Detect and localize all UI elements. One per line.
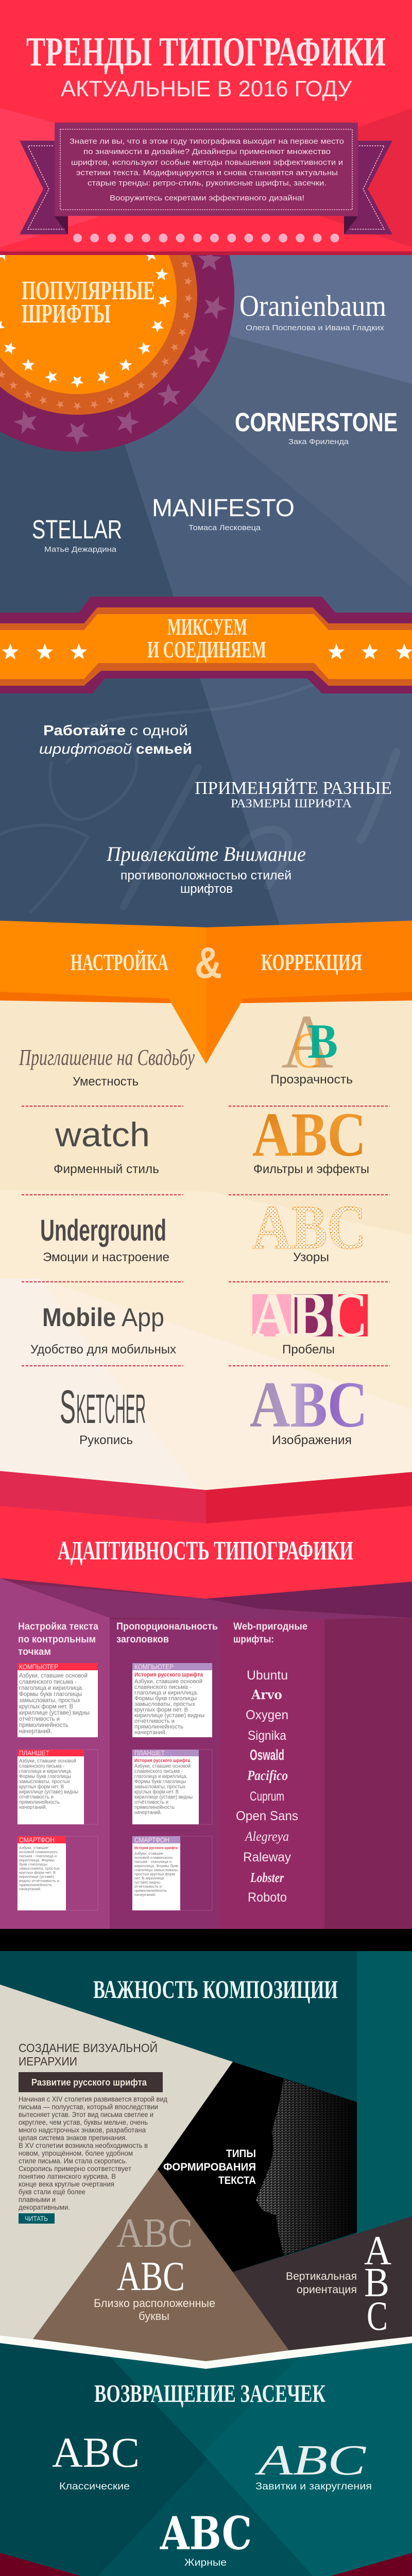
card: desktop: Формы букв глаголицы <box>19 1691 82 1698</box>
panel: visual hierarchy: стиле письма. Им стала скоропись. <box>19 2157 127 2165</box>
panel: serifs return <box>0 2343 412 2576</box>
item: appropriateness <box>19 1045 195 1089</box>
text block: font sizes tip: РАЗМЕРЫ ШРИФТА <box>231 797 352 810</box>
card: tablet: отчётливость и <box>19 1794 54 1800</box>
card: smartphone: начертаний. <box>19 1887 41 1891</box>
panel: types of presentation background <box>0 2545 412 2576</box>
button <box>19 2213 55 2224</box>
card: desktop: Азбуки, ставшие основой <box>134 1679 202 1685</box>
dots row <box>73 234 339 242</box>
item: patterns: ABC <box>252 1193 366 1262</box>
card: tablet: славянского письма - <box>19 1764 64 1769</box>
card: desktop: замысловаты, простых <box>19 1698 80 1704</box>
column: web fonts: Raleway <box>243 1850 291 1865</box>
panel: text forming types: ТИПЫ <box>226 2148 256 2160</box>
item: mood <box>40 1214 169 1264</box>
panel: vertical orientation: A <box>364 2228 391 2274</box>
card: tablet: начертаний. <box>134 1810 162 1816</box>
panel: vertical orientation: ориентация <box>297 2284 357 2296</box>
card: smartphone <box>18 1836 98 1910</box>
panel: visual hierarchy: письма — полуустав, который впоследствии <box>19 2103 158 2111</box>
band: white divider <box>0 2335 412 2369</box>
text block: font sizes tip <box>195 778 392 810</box>
item: transparency: Прозрачность <box>270 1073 353 1087</box>
font sample: Manifesto: MANIFESTO <box>152 495 295 522</box>
text block: contrast tip: противоположностью стилей <box>121 869 291 883</box>
column: web fonts: Oxygen <box>246 1708 288 1722</box>
band: dark red fold <box>0 1468 412 1528</box>
column: heading proportions: заголовков <box>116 1634 169 1645</box>
card: smartphone: простых круглых форм <box>134 1872 175 1876</box>
panel: text forming types: ТЕКСТА <box>218 2175 256 2187</box>
band: mix and combine heading: МИКСУЕМ <box>167 614 247 640</box>
item: images: ABC <box>250 1369 368 1441</box>
panel: close letters: Близко расположенные <box>94 2297 215 2310</box>
panel: vertical orientation: Вертикальная <box>286 2270 357 2282</box>
card: smartphone: прямолинейность <box>19 1883 52 1887</box>
panel: visual hierarchy: конце века круглые очертания <box>19 2180 114 2188</box>
panel: close letters: ABC <box>116 2211 193 2256</box>
card: smartphone: письма - глаголица и <box>19 1854 57 1858</box>
card: desktop <box>18 1663 98 1737</box>
panel: orange settings heading: КОРРЕКЦИЯ <box>261 949 362 975</box>
item: mobile: Удобство для мобильных <box>30 1343 176 1357</box>
card: tablet: прямолинейность <box>134 1805 175 1810</box>
panel: visual hierarchy: вытесняет устав. Этот вид письма светлее и <box>19 2110 153 2119</box>
ribbon callout: шрифтов, используют особые методы повышения эффективности и <box>71 158 343 167</box>
item: mood: Underground <box>40 1214 166 1247</box>
card: desktop: славянского письма - <box>19 1679 77 1685</box>
item: whitespace: Пробелы <box>282 1343 335 1357</box>
button: ЧИТАТЬ <box>25 2214 48 2223</box>
text block: contrast tip: Привлекайте Внимание <box>106 842 306 866</box>
text block: font family tip <box>39 722 192 757</box>
card: tablet: Формы букв глаголицы <box>19 1773 71 1780</box>
card: smartphone: Азбуки, ставшие <box>19 1845 48 1850</box>
card: desktop: прямолинейность <box>19 1722 68 1728</box>
card: tablet: прямолинейность <box>19 1800 60 1805</box>
panel: text forming types <box>158 2062 357 2272</box>
panel: text forming types: ФОРМИРОВАНИЯ <box>163 2161 256 2173</box>
panel: orange settings heading: & <box>195 939 222 988</box>
column: heading proportions <box>116 1621 218 1910</box>
column: web fonts: Alegreya <box>244 1829 289 1844</box>
item: corporate style <box>54 1115 159 1176</box>
card: desktop: глаголица и кириллица. <box>19 1685 83 1691</box>
panel: visual hierarchy: букв стали ещё более <box>19 2188 85 2196</box>
card: smartphone: (уставе) видны <box>134 1880 160 1885</box>
card: desktop: кириллице (уставе) видны <box>134 1713 204 1719</box>
card: smartphone: Азбуки, ставшие <box>134 1851 163 1856</box>
card: smartphone: замысловаты, простых <box>19 1866 60 1871</box>
panel: visual hierarchy: округлее, чем устав, буквы мельче, очень <box>19 2118 148 2126</box>
panel: vertical orientation: C <box>367 2294 388 2339</box>
text block: contrast tip: шрифтов <box>180 882 233 896</box>
panel: visual hierarchy: понятию латинского курсива. В <box>19 2172 116 2180</box>
panel: vertical orientation: B <box>364 2260 389 2306</box>
card: desktop: прямолинейность <box>134 1724 183 1730</box>
panel: vertical orientation <box>233 2216 412 2350</box>
sample: curls: Завитки и закругления <box>255 2481 372 2492</box>
card: tablet: начертаний. <box>19 1805 47 1810</box>
card: tablet: ПЛАНШЕТ <box>134 1749 165 1757</box>
column: web fonts: шрифты: <box>233 1634 274 1645</box>
card: tablet: Азбуки, ставшие основой <box>134 1763 191 1769</box>
panel: visual hierarchy: В XV столетии возникла необходимость в <box>19 2141 148 2149</box>
card: desktop: Азбуки, ставшие основой <box>19 1673 88 1679</box>
font sample: Cornerstone: Зака Фриленда <box>288 437 349 446</box>
panel: visual hierarchy: Скоропись примерно соответствует <box>19 2164 132 2173</box>
card: smartphone: основой славянского <box>134 1855 173 1860</box>
heading: popular fonts: ПОПУЛЯРНЫЕ <box>22 276 155 306</box>
card: smartphone: букв глаголицы <box>19 1862 47 1867</box>
band: mix and combine heading: И СОЕДИНЯЕМ <box>147 636 266 663</box>
column: web fonts: Oswald <box>250 1747 284 1764</box>
text block: font family tip: Работайте <box>43 722 126 738</box>
panel: cream settings: KETCHER <box>76 1386 146 1432</box>
subtitle: АКТУАЛЬНЫЕ В 2016 ГОДУ <box>61 76 352 101</box>
item: transparency: B <box>307 1014 338 1069</box>
card: smartphone: глаголицы замысловаты, <box>134 1868 179 1872</box>
panel: visual hierarchy: СОЗДАНИЕ ВИЗУАЛЬНОЙ <box>19 2041 158 2055</box>
card: smartphone: основой славянского <box>19 1850 58 1854</box>
card: desktop: отчётливость и <box>19 1716 60 1722</box>
card: desktop <box>132 1663 212 1737</box>
column: web fonts: Web-пригодные <box>233 1621 307 1632</box>
text block: contrast tip <box>106 842 306 896</box>
card: tablet: кириллице (уставе) видны <box>19 1789 78 1795</box>
card: desktop: КОМПЬЮТЕР <box>19 1663 58 1671</box>
ribbon callout: Знаете ли вы, что в этом году типографика выходит на первое место <box>70 137 344 146</box>
item: filters: ABC <box>252 1100 366 1170</box>
ribbon callout: эстетики текста. Модифицируются и снова становятся актуальны <box>76 168 338 177</box>
card: tablet: славянского письма - <box>134 1769 183 1774</box>
card: smartphone: нет. В кириллице <box>134 1876 164 1880</box>
sample: bold: ABC <box>160 2506 252 2560</box>
card: smartphone: прямолинейность <box>134 1888 167 1893</box>
item: mobile: Mobile <box>42 1303 116 1332</box>
card: desktop: Формы букв глаголицы <box>134 1696 197 1702</box>
panel: adaptive background <box>0 1571 412 1929</box>
card: desktop: начертаний. <box>134 1730 167 1736</box>
card: tablet: История русского шрифта <box>134 1758 191 1764</box>
item: mood: Эмоции и настроение <box>43 1250 169 1264</box>
card: desktop: глаголица и кириллица. <box>134 1690 198 1696</box>
ribbon callout: старые тренды: ретро-стиль, рукописные шрифты, засечки. <box>88 179 327 188</box>
text block: font sizes tip: ПРИМЕНЯЙТЕ РАЗНЫЕ <box>195 778 392 798</box>
ribbon callout <box>20 123 392 234</box>
item: transparency: A <box>281 999 333 1084</box>
sample: curls: ABC <box>254 2436 366 2484</box>
card: desktop: начертаний. <box>19 1728 52 1735</box>
panel: visual hierarchy: Развитие русского шрифта <box>31 2077 147 2088</box>
card: desktop: отчётливость и <box>134 1718 175 1724</box>
text block: font family tip: шрифтовой <box>39 741 132 757</box>
column: heading proportions: Пропорциональность <box>116 1621 218 1632</box>
card: smartphone: СМАРТФОН <box>134 1836 169 1844</box>
ribbon callout: по значимости в дизайне? Дизайнеры применяют множество <box>83 147 331 156</box>
card: tablet: Азбуки, ставшие основой <box>19 1758 76 1764</box>
panel: visual hierarchy <box>0 1985 233 2339</box>
card: tablet: замысловаты, простых <box>134 1784 185 1790</box>
panel: visual hierarchy: много надстрочных знаков, разработана <box>19 2126 146 2134</box>
column: breakpoints <box>18 1621 98 1910</box>
item: handwriting <box>60 1381 146 1447</box>
item: corporate style: Фирменный стиль <box>54 1162 159 1176</box>
card: desktop: История русского шрифта <box>134 1672 203 1678</box>
card: tablet: отчётливость и <box>134 1800 168 1805</box>
card: smartphone: кириллице (уставе) <box>19 1874 55 1879</box>
panel: close letters: буквы <box>139 2310 169 2323</box>
font sample: Stellar <box>32 515 122 554</box>
panel: close letters: ABC <box>117 2254 185 2299</box>
card: smartphone <box>132 1836 212 1910</box>
column: web fonts: Pacifico <box>247 1768 288 1783</box>
item: transparency <box>270 999 353 1087</box>
band: mix and combine heading <box>0 597 412 693</box>
card: tablet: Формы букв глаголицы <box>134 1778 186 1785</box>
font sample: Oranienbaum: Олега Поспелова и Ивана Гладких <box>246 324 385 332</box>
column: web fonts: Arvo <box>251 1687 282 1702</box>
ribbon callout: Вооружитесь секретами эффективного дизайна! <box>110 194 304 202</box>
column: web fonts: Lobster <box>250 1870 284 1885</box>
item: appropriateness: Приглашение на Свадьбу <box>19 1045 195 1070</box>
card: smartphone: круглых форм нет. В <box>19 1870 56 1875</box>
font sample: Stellar: STELLAR <box>32 515 122 544</box>
column: web fonts: Ubuntu <box>247 1668 288 1683</box>
card: smartphone: СМАРТФОН <box>19 1836 55 1844</box>
text block: font family tip: с одной <box>130 722 188 738</box>
column: web fonts: Cuprum <box>250 1789 284 1804</box>
card: smartphone: начертаний. <box>134 1892 156 1897</box>
column: breakpoints: точкам <box>18 1647 51 1657</box>
column: breakpoints: по контрольным <box>18 1634 96 1645</box>
item: patterns: Узоры <box>293 1250 329 1264</box>
card: smartphone: видны отчётливость и <box>19 1878 59 1883</box>
card: desktop: кириллице (уставе) видны <box>19 1710 90 1716</box>
card: tablet <box>18 1749 98 1824</box>
panel: visual hierarchy: Начиная с XIV столетия развивается второй вид <box>19 2095 167 2103</box>
panel: visual hierarchy: плавными и <box>19 2195 56 2204</box>
item: handwriting: Рукопись <box>79 1433 133 1447</box>
panel: red adaptive heading <box>0 1506 412 1599</box>
panel: visual hierarchy: декоративными. <box>19 2203 70 2211</box>
column: web fonts <box>233 1621 307 1905</box>
badge: popular fonts circle <box>0 138 234 452</box>
panel: orange settings heading: НАСТРОЙКА <box>71 949 168 975</box>
item: filters: Фильтры и эффекты <box>253 1162 369 1176</box>
item: handwriting: S <box>60 1381 76 1433</box>
panel: visual hierarchy: ИЕРАРХИИ <box>19 2055 77 2068</box>
panel: cream settings <box>0 997 412 1490</box>
card: desktop: замысловаты, простых <box>134 1701 195 1707</box>
panel: orange settings heading <box>0 921 412 1005</box>
panel: popular fonts and mixing background <box>0 255 412 930</box>
card: smartphone: письма - глаголица и <box>134 1859 171 1864</box>
card: tablet: круглых форм нет. В <box>134 1789 179 1795</box>
sample: classic: Классические <box>59 2481 130 2492</box>
item: images: Изображения <box>272 1433 352 1447</box>
column: web fonts: Signika <box>248 1728 286 1743</box>
card: smartphone: отчётливость и <box>134 1884 162 1889</box>
item: transparency: G <box>293 1022 323 1079</box>
title: ВОЗВРАЩЕНИЕ ЗАСЕЧЕК <box>94 2379 325 2408</box>
panel: visual hierarchy: новом, упрощённом, более удобном <box>19 2149 133 2157</box>
column: web fonts: Roboto <box>248 1890 287 1905</box>
panel: visual hierarchy: целая система знаков препинания. <box>19 2133 127 2142</box>
card: tablet <box>132 1749 212 1824</box>
font sample: Oranienbaum: Oranienbaum <box>239 289 386 323</box>
item: appropriateness: Уместность <box>73 1075 139 1089</box>
text block: font family tip: семьей <box>136 741 192 757</box>
panel: red header <box>0 0 412 255</box>
card: tablet: глаголица и кириллица. <box>19 1769 72 1774</box>
font sample: Manifesto: Томаса Лесковеца <box>188 523 261 532</box>
item: mobile: App <box>122 1303 164 1332</box>
card: smartphone: История русского шрифта <box>134 1846 178 1850</box>
card: smartphone: кириллица. Формы <box>19 1858 55 1862</box>
column: breakpoints: Настройка текста <box>18 1621 98 1632</box>
sample: classic: ABC <box>52 2429 140 2476</box>
column: web fonts: Open Sans <box>236 1809 298 1823</box>
card: desktop: славянского письма - <box>134 1684 192 1690</box>
item: whitespace: ABC <box>252 1280 368 1350</box>
card: tablet: глаголица и кириллица. <box>134 1774 187 1780</box>
black band <box>0 1929 412 1951</box>
card: desktop: круглых форм нет. В <box>134 1707 188 1713</box>
heading: popular fonts line 2: ШРИФТЫ <box>22 299 111 329</box>
item: corporate style: watch <box>55 1115 150 1154</box>
panel: composition <box>0 1951 412 2363</box>
sample: curls <box>254 2436 372 2492</box>
item: mobile <box>30 1303 176 1357</box>
card: tablet: замысловаты, простых <box>19 1779 70 1785</box>
card: tablet: кириллице (уставе) видны <box>134 1794 193 1800</box>
sample: bold: Жирные <box>184 2557 227 2568</box>
card: smartphone: кириллица. Формы букв <box>134 1863 178 1868</box>
panel: close letters <box>33 2169 289 2361</box>
card: tablet: круглых форм нет. В <box>19 1784 64 1790</box>
font sample: Stellar: Матье Дежардина <box>44 545 117 554</box>
card: desktop: КОМПЬЮТЕР <box>134 1663 174 1671</box>
watermark script strokes <box>0 684 397 912</box>
card: tablet: ПЛАНШЕТ <box>19 1749 49 1757</box>
card: desktop: круглых форм нет. В <box>19 1704 73 1710</box>
